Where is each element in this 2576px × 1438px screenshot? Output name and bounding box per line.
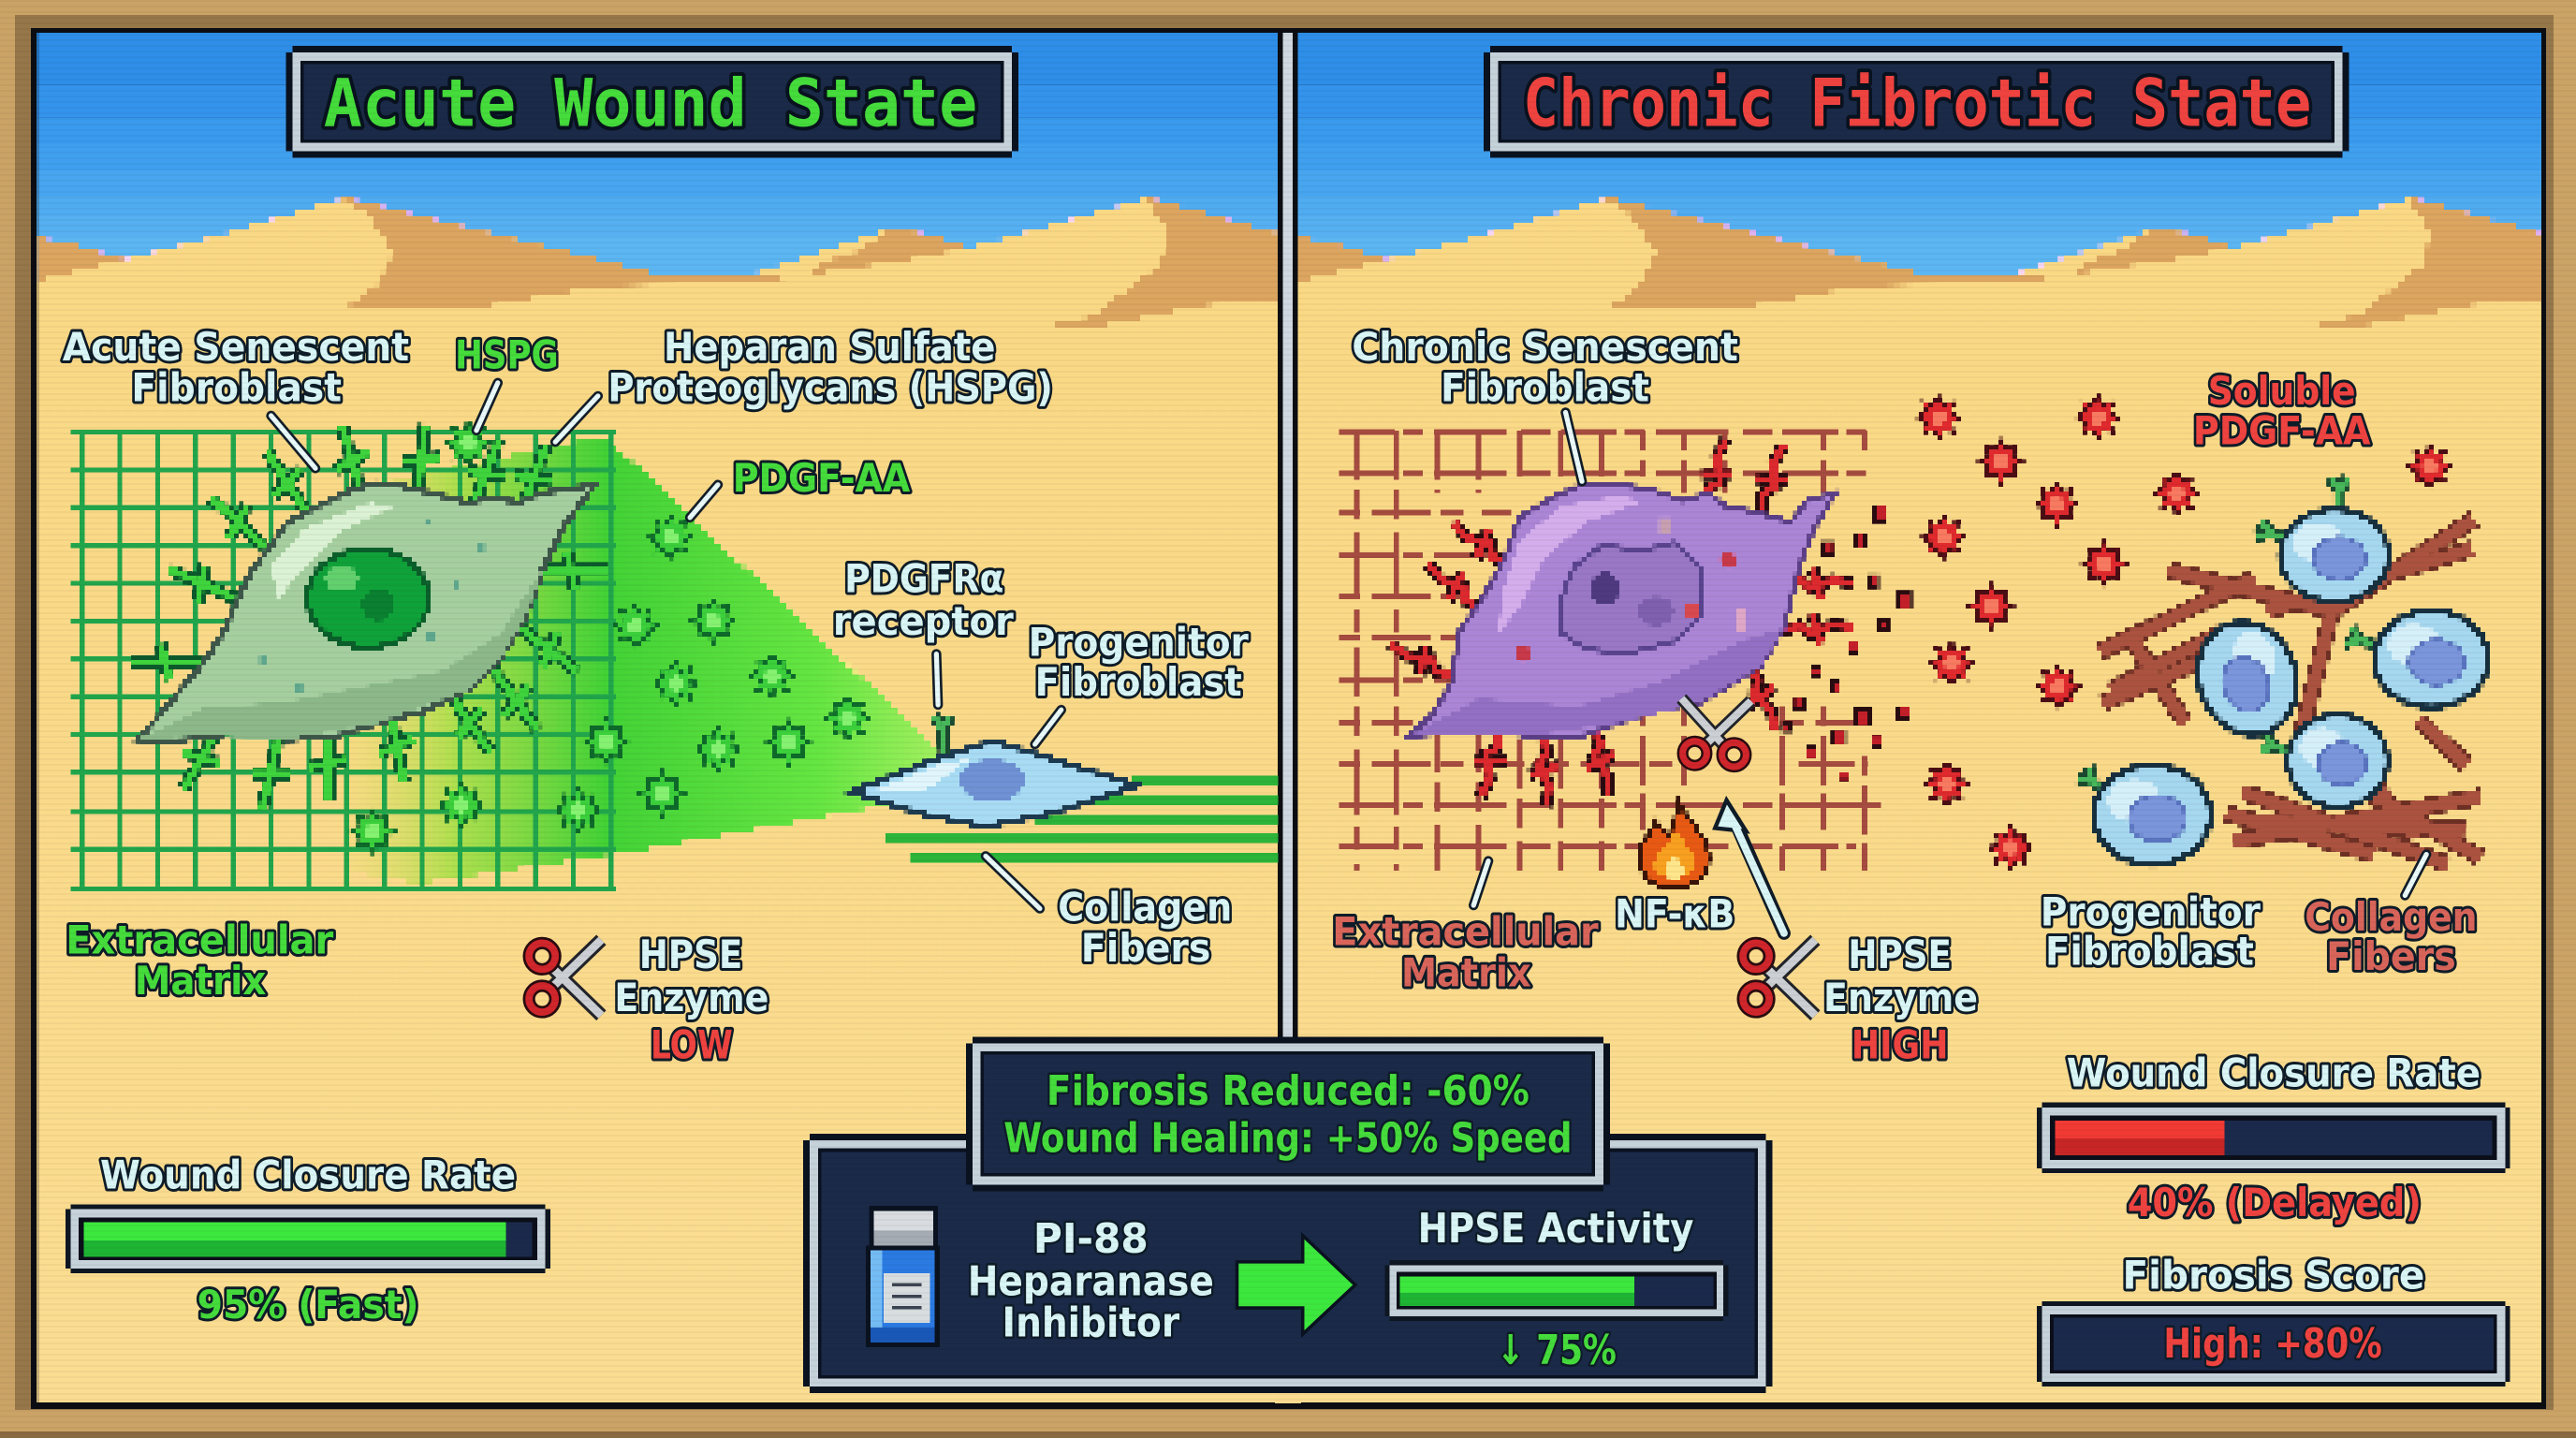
label: chronic senescent fibroblast: Chronic Senescent <box>1352 324 1738 370</box>
label: HPSE enzyme high: HIGH <box>1852 1022 1948 1068</box>
nucleus <box>307 549 429 647</box>
collagen fibers brown tangle <box>2100 520 2481 864</box>
label: progenitor fibroblast: Progenitor <box>2041 889 2261 935</box>
cell body <box>1410 483 1835 738</box>
label: extracellular matrix: Extracellular <box>1332 909 1599 955</box>
label: PI-88 heparanase inhibitor: Heparanase <box>968 1257 1214 1305</box>
icon: flame NF-kB <box>1639 801 1709 888</box>
label: heparan sulfate proteoglycans: Heparan Sulfate <box>664 324 996 370</box>
title: chronic fibrotic state: Chronic Fibrotic State <box>1523 66 2311 142</box>
soluble PDGF-AA red particles <box>1917 396 2451 869</box>
label: soluble PDGF-AA: PDGF-AA <box>2193 407 2371 453</box>
cell body <box>138 483 594 742</box>
icon: PI-88 vial <box>866 1206 940 1347</box>
label: extracellular matrix: Matrix <box>1401 949 1531 995</box>
label: PDGFR alpha receptor: receptor <box>833 598 1014 644</box>
label: progenitor fibroblast: Fibroblast <box>2045 929 2254 975</box>
desert background right <box>1299 33 2541 1405</box>
label: soluble PDGF-AA: Soluble <box>2208 368 2356 414</box>
title: acute wound state: Acute Wound State <box>324 66 977 142</box>
label: soluble PDGF-AA <box>2193 368 2371 453</box>
wound closure rate fast: 95% (Fast) <box>198 1282 419 1328</box>
progenitor fibroblast <box>851 716 1136 827</box>
results callout <box>966 1036 1610 1191</box>
label: chronic senescent fibroblast <box>1352 324 1738 411</box>
label: heparan sulfate proteoglycans <box>607 324 1053 411</box>
label: extracellular matrix <box>66 917 333 1004</box>
label: HPSE enzyme high: Enzyme <box>1823 975 1978 1020</box>
icon: scissors at cell <box>1679 698 1751 768</box>
label: collagen fibers: Fibers <box>2326 933 2456 979</box>
label: acute senescent fibroblast <box>63 324 409 411</box>
arrow: inhibition effect <box>1237 1236 1355 1334</box>
results callout: Fibrosis Reduced: -60% <box>1046 1067 1530 1115</box>
broken red spikes <box>1384 435 1854 808</box>
label: NF-kB: NF-κB <box>1615 890 1734 936</box>
label: collagen fibers <box>1058 884 1232 971</box>
wound closure rate delayed: Wound Closure Rate <box>2067 1050 2481 1096</box>
icon: scissors high <box>1743 940 1815 1016</box>
label: HPSE enzyme low: HPSE <box>639 932 742 977</box>
arrow: HPSE to scissors <box>1715 800 1784 933</box>
panel: acute wound state <box>37 33 1278 1405</box>
label: extracellular matrix: Matrix <box>135 958 266 1004</box>
icon: scissors low <box>529 940 601 1016</box>
progenitor fibroblast cells <box>2077 478 2488 865</box>
panel: PI-88 treatment <box>803 1036 1773 1393</box>
wound closure rate delayed <box>2037 1050 2510 1225</box>
label: progenitor fibroblast <box>1029 620 1249 705</box>
leader lines left <box>271 383 1061 909</box>
label: PDGFR alpha receptor <box>833 555 1014 644</box>
label: HPSE enzyme low <box>614 932 768 1068</box>
fibrosis score: Fibrosis Score <box>2122 1252 2424 1298</box>
label: PI-88 heparanase inhibitor: Inhibitor <box>1003 1299 1179 1346</box>
progress bar 95 percent <box>66 1204 550 1273</box>
label: progenitor fibroblast: Progenitor <box>1029 620 1249 666</box>
label: PDGFR alpha receptor: PDGFRα <box>844 555 1003 601</box>
extracellular matrix grid <box>70 431 616 888</box>
label: HPSE enzyme low: Enzyme <box>614 975 768 1020</box>
results callout: Wound Healing: +50% Speed <box>1003 1115 1573 1163</box>
wound closure rate fast <box>66 1152 550 1328</box>
HPSE activity meter: HPSE Activity <box>1418 1205 1693 1253</box>
label: HPSE enzyme low: LOW <box>651 1022 733 1068</box>
score box <box>2037 1301 2510 1387</box>
label: acute senescent fibroblast: Fibroblast <box>131 365 342 411</box>
center divider <box>1275 33 1301 1403</box>
title: chronic fibrotic state <box>1484 46 2349 157</box>
wound closure rate delayed: 40% (Delayed) <box>2128 1180 2422 1225</box>
HPSE activity meter: ↓ 75% <box>1497 1327 1617 1374</box>
label: acute senescent fibroblast: Acute Senescent <box>63 324 409 370</box>
treatment frame <box>803 1134 1773 1393</box>
broken extracellular matrix <box>1339 431 1881 871</box>
fibrosis score <box>2037 1252 2510 1387</box>
wound closure rate fast: Wound Closure Rate <box>100 1152 516 1197</box>
label: HSPG: HSPG <box>455 332 559 378</box>
label: HPSE enzyme high: HPSE <box>1848 932 1952 977</box>
progress bar 40 percent <box>2037 1103 2510 1173</box>
chronic senescent fibroblast cell <box>1384 435 1854 808</box>
HSPG spikes <box>130 422 607 812</box>
fibrosis score: High: +80% <box>2163 1320 2382 1368</box>
HPSE activity meter <box>1384 1205 1728 1374</box>
label: chronic senescent fibroblast: Fibroblast <box>1441 365 1649 411</box>
leader lines right <box>1473 413 2426 905</box>
label: collagen fibers: Collagen <box>1058 884 1232 930</box>
label: collagen fibers: Collagen <box>2305 894 2478 940</box>
collagen fibers green <box>886 781 1278 858</box>
label: progenitor fibroblast <box>2041 889 2261 975</box>
panel: chronic fibrotic state <box>1299 33 2541 1405</box>
label: extracellular matrix <box>1332 909 1599 995</box>
acute senescent fibroblast cell <box>130 422 607 812</box>
label: PDGF-AA: PDGF-AA <box>733 455 911 501</box>
label: PI-88 heparanase inhibitor: PI-88 <box>1033 1215 1149 1263</box>
debris fragments <box>1782 506 1910 781</box>
label: extracellular matrix: Extracellular <box>66 917 333 962</box>
label: progenitor fibroblast: Fibroblast <box>1035 659 1242 705</box>
title: acute wound state <box>285 46 1018 157</box>
label: HPSE enzyme high <box>1823 932 1978 1068</box>
label: PI-88 heparanase inhibitor <box>968 1215 1214 1346</box>
nucleus <box>1560 542 1700 653</box>
PDGF-AA green particles <box>352 422 869 853</box>
activity bar <box>1384 1260 1728 1321</box>
label: collagen fibers <box>2305 894 2478 979</box>
desert background left <box>37 33 1278 1405</box>
label: heparan sulfate proteoglycans: Proteoglycans (HSPG) <box>607 365 1053 411</box>
label: collagen fibers: Fibers <box>1081 925 1210 971</box>
